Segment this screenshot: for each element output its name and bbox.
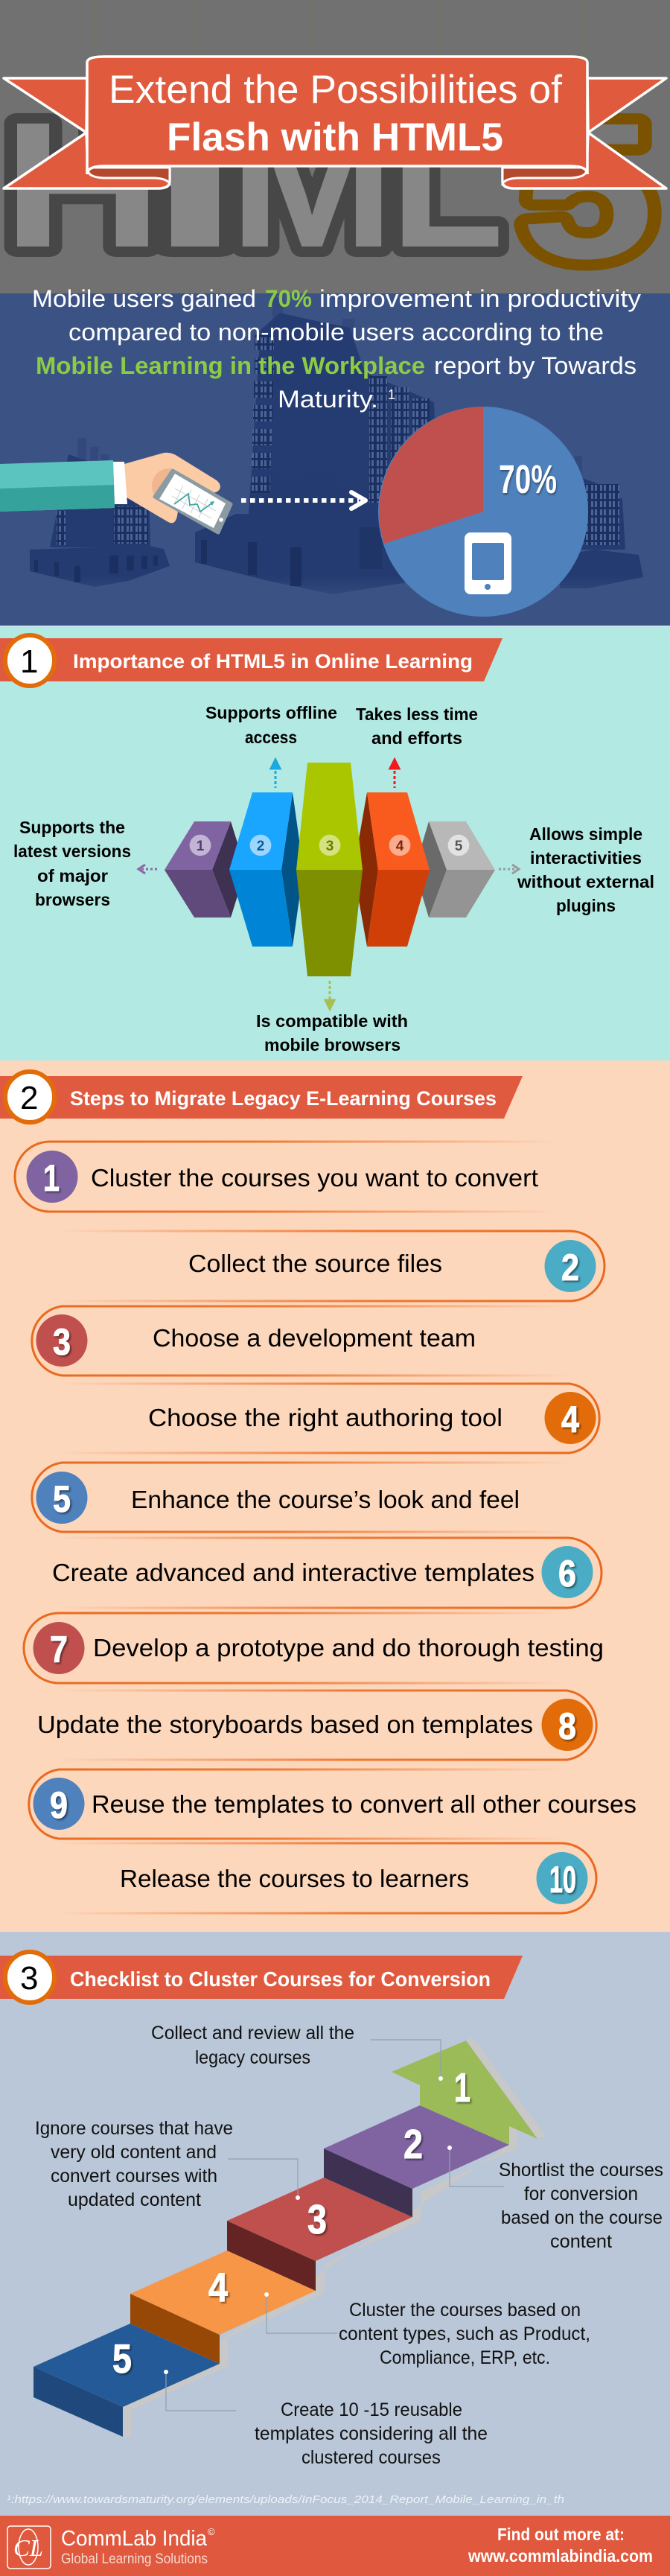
label: create templates: clustered courses xyxy=(302,2447,441,2468)
step 5: 5 xyxy=(53,1478,71,1520)
label: latest browsers: of major xyxy=(37,866,108,885)
arrow: blue up xyxy=(271,760,280,788)
arrow: red up xyxy=(390,760,399,788)
block 2 xyxy=(229,792,300,947)
label: cluster by type: content types, such as Product, xyxy=(339,2324,590,2344)
step 1 arrow xyxy=(392,2041,537,2145)
step 2 xyxy=(324,2105,509,2217)
label: ignore courses: convert courses with xyxy=(51,2166,217,2187)
title text: Extend the Possibilities of xyxy=(109,68,562,112)
step 9: 9 xyxy=(50,1784,68,1826)
step 7 xyxy=(24,1613,604,1683)
panel: checklist xyxy=(0,1932,670,2516)
section banner 2: 2 xyxy=(20,1080,38,1116)
step 4: Choose the right authoring tool xyxy=(148,1404,502,1431)
section banner 1: Importance of HTML5 in Online Learning xyxy=(73,650,473,672)
step 5: 5 xyxy=(112,2335,132,2382)
step 9 xyxy=(29,1769,636,1839)
label: shortlist xyxy=(499,2160,663,2252)
label: cluster by type: Compliance, ERP, etc. xyxy=(380,2347,550,2368)
panel: importance of HTML5 xyxy=(0,626,670,1060)
step 2: 2 xyxy=(403,2121,423,2167)
statistic text: compared to non-mobile users according to the xyxy=(68,319,604,346)
ribbon tail right xyxy=(502,78,666,188)
label: create templates: templates considering all the xyxy=(255,2423,488,2444)
brand name: © xyxy=(208,2526,215,2537)
label: mobile browsers xyxy=(256,1011,408,1055)
brand name: CommLab India xyxy=(61,2527,208,2551)
brand name: Global Learning Solutions xyxy=(61,2551,208,2567)
label: latest browsers: Supports the xyxy=(19,818,125,837)
step 3 xyxy=(32,1306,572,1376)
label: ignore courses xyxy=(35,2118,233,2210)
step 1: 1 xyxy=(43,1157,60,1199)
diagram: five blocks xyxy=(165,763,495,976)
label: create templates xyxy=(255,2400,488,2468)
arrow: gray right xyxy=(499,865,519,874)
label: latest browsers: browsers xyxy=(35,890,110,909)
panel: header background: L xyxy=(390,85,504,284)
arrow: purple left xyxy=(138,865,158,874)
label: simple interactivities: Allows simple xyxy=(529,824,642,844)
label: simple interactivities xyxy=(517,824,654,915)
title text: Flash with HTML5 xyxy=(167,115,503,159)
label: collect and review: legacy courses xyxy=(195,2047,310,2068)
title text xyxy=(109,68,562,159)
statistic text: 70% xyxy=(265,285,312,312)
ribbon body xyxy=(87,57,587,174)
step 7: 7 xyxy=(50,1629,68,1670)
building silhouettes xyxy=(30,298,643,594)
label: supports offline access: Supports offline xyxy=(205,703,337,722)
block 1 xyxy=(165,821,238,917)
panel: migration steps xyxy=(0,1060,670,1932)
icon: tablet xyxy=(465,532,511,594)
arrow: green down xyxy=(325,981,334,1009)
find out more xyxy=(468,2525,653,2566)
panel: header background xyxy=(0,0,670,299)
step 1: Cluster the courses you want to convert xyxy=(91,1164,538,1192)
block 5: 5 xyxy=(455,839,463,854)
step 1 xyxy=(15,1142,560,1212)
label: collect and review: Collect and review all the xyxy=(151,2023,354,2044)
statistic text: Mobile Learning in the Workplace xyxy=(36,352,425,379)
icon: hand holding phone xyxy=(0,453,231,532)
section banner 2: Steps to Migrate Legacy E-Learning Courses xyxy=(70,1087,497,1110)
section banner 1: 1 xyxy=(20,643,38,680)
brand name xyxy=(61,2526,215,2567)
step 3 xyxy=(227,2178,412,2291)
label: ignore courses: updated content xyxy=(68,2189,201,2210)
find out more: Find out more at: xyxy=(497,2525,625,2544)
central tower xyxy=(249,313,439,514)
panel: header background: 5 xyxy=(520,83,654,299)
step 3: 3 xyxy=(53,1321,71,1363)
pie chart: 70 percent xyxy=(378,407,588,617)
label: shortlist: based on the course xyxy=(501,2207,663,2228)
arrow: dotted to pie chart xyxy=(241,492,366,509)
pie label: 70% xyxy=(499,457,557,502)
statistic text: 1 xyxy=(388,387,395,402)
leader 5 xyxy=(164,2370,236,2411)
step 2: Collect the source files xyxy=(188,1250,442,1277)
label: shortlist: Shortlist the courses xyxy=(499,2160,663,2181)
step 4: 4 xyxy=(561,1399,579,1440)
leader 1 xyxy=(371,2040,443,2081)
step 2: 2 xyxy=(561,1247,579,1288)
label: simple interactivities: interactivities xyxy=(530,848,642,868)
step 2 xyxy=(56,1231,604,1301)
ribbon tail left xyxy=(4,78,170,188)
leader 3 xyxy=(228,2159,300,2200)
step 4 xyxy=(130,2251,316,2364)
step 7: Develop a prototype and do thorough testing xyxy=(93,1634,604,1661)
step 6: 6 xyxy=(558,1553,576,1594)
title ribbon xyxy=(4,57,666,188)
statistic text xyxy=(32,285,641,413)
step 8 xyxy=(37,1691,596,1760)
statistic text: improvement in productivity xyxy=(319,285,641,312)
right building xyxy=(578,477,625,550)
block 3: 3 xyxy=(326,839,334,854)
panel: header background: M xyxy=(229,85,395,284)
label: simple interactivities: plugins xyxy=(556,896,616,915)
label: takes less time: and efforts xyxy=(371,728,462,748)
label: mobile browsers: Is compatible with xyxy=(256,1011,408,1031)
block 4 xyxy=(359,792,430,947)
label: ignore courses: very old content and xyxy=(51,2142,217,2163)
step 8: 8 xyxy=(558,1705,576,1747)
chimneys xyxy=(272,298,283,328)
step 5 xyxy=(32,1463,572,1532)
leader 2 xyxy=(447,2146,504,2187)
label: cluster by type: Cluster the courses based on xyxy=(349,2300,581,2321)
label: create templates: Create 10 -15 reusable xyxy=(281,2400,462,2420)
step 4: 4 xyxy=(208,2264,228,2310)
footnote: ¹:https://www.towardsmaturity.org/elements/uploads/InFocus_2014_Report_Mobile_Learning_in_th xyxy=(7,2493,564,2506)
staircase diagram xyxy=(34,2037,546,2437)
section banner 2 xyxy=(0,1072,523,1122)
block 5 xyxy=(422,821,495,917)
block 1: 1 xyxy=(197,839,205,854)
panel: header background: T xyxy=(94,85,296,284)
step 6 xyxy=(52,1538,602,1608)
panel: mobile productivity statistic xyxy=(0,285,670,626)
step 3: Choose a development team xyxy=(153,1324,476,1352)
block 2: 2 xyxy=(257,839,264,854)
section banner 3 xyxy=(0,1952,523,2003)
section banner 3: Checklist to Cluster Courses for Conversion xyxy=(70,1968,491,1991)
step 10: 10 xyxy=(549,1859,576,1901)
leader 4 xyxy=(264,2292,337,2333)
panel: header background: H xyxy=(2,85,163,284)
left building xyxy=(50,454,150,547)
label: shortlist: content xyxy=(550,2231,612,2252)
label: takes less time: Takes less time xyxy=(356,705,478,724)
statistic text: Mobile users gained xyxy=(32,285,256,312)
step 5: Enhance the course’s look and feel xyxy=(131,1486,520,1513)
step 9: Reuse the templates to convert all other courses xyxy=(92,1790,636,1818)
label: takes less time xyxy=(356,705,478,748)
step 6: Create advanced and interactive templates xyxy=(52,1559,535,1586)
label: supports offline access xyxy=(205,703,337,747)
label: latest browsers xyxy=(13,818,131,909)
section banner 3: 3 xyxy=(20,1960,38,1997)
section banner 1 xyxy=(0,635,502,686)
central base xyxy=(195,514,417,594)
label: ignore courses: Ignore courses that have xyxy=(35,2118,233,2139)
label: mobile browsers: mobile browsers xyxy=(264,1035,401,1055)
label: latest browsers: latest versions xyxy=(13,842,131,861)
step 3: 3 xyxy=(307,2196,327,2242)
statistic text: Maturity. xyxy=(278,386,378,413)
step 4 xyxy=(56,1384,599,1453)
block 4: 4 xyxy=(396,839,404,854)
logo: CL xyxy=(13,2534,43,2561)
step 8: Update the storyboards based on templates xyxy=(37,1711,533,1738)
step 10: Release the courses to learners xyxy=(120,1865,469,1892)
statistic text: report by Towards xyxy=(434,352,636,379)
label: simple interactivities: without external xyxy=(517,872,654,891)
step 5 xyxy=(34,2324,220,2437)
label: shortlist: for conversion xyxy=(524,2184,638,2204)
footer xyxy=(0,2516,670,2576)
stair shadow edge xyxy=(123,2037,546,2437)
block 3 xyxy=(296,763,363,976)
logo xyxy=(7,2526,51,2569)
find out more: www.commlabindia.com xyxy=(468,2546,653,2566)
label: collect and review xyxy=(151,2023,354,2068)
label: supports offline access: access xyxy=(245,728,297,747)
label: cluster by type xyxy=(339,2300,590,2368)
step 1 arrow: 1 xyxy=(454,2064,470,2111)
step 10 xyxy=(56,1843,596,1913)
